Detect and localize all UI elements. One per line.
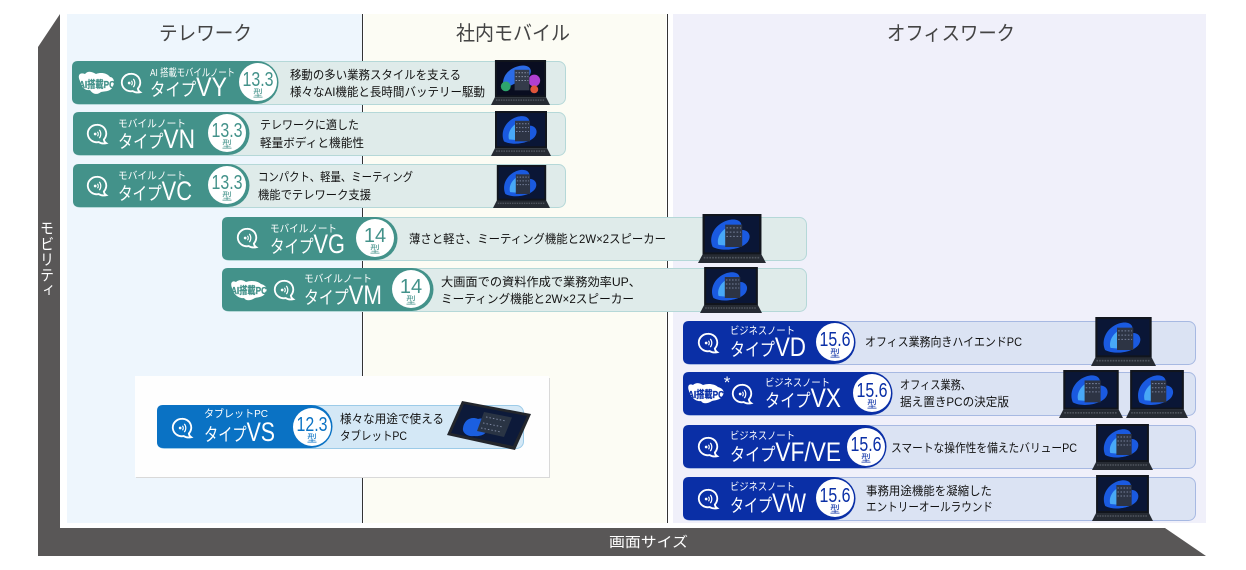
- size badge: 13.3: 型: [222, 138, 232, 151]
- icon: speech bubble: [275, 281, 293, 299]
- size badge: 13.3: [208, 114, 246, 152]
- size badge: 13.3: [208, 166, 246, 204]
- row: type VS: タブレットPC: [340, 428, 407, 443]
- icon: speech bubble: [88, 125, 106, 143]
- badge: AI PC: AI搭載PC: [231, 284, 267, 297]
- row: type VM: ミーティング機能と2W×2スピーカー: [441, 292, 634, 306]
- laptop image: [493, 165, 550, 208]
- row: type VM: タイプVM: [304, 280, 382, 310]
- size badge: 15.6: 型: [830, 503, 840, 516]
- row: type VN: [73, 111, 566, 156]
- row: type VF/VE: スマートな操作性を備えたバリューPC: [891, 440, 1077, 455]
- size badge: 15.6: 15.6: [856, 380, 888, 402]
- icon: speech bubble: [238, 229, 256, 247]
- row: type VW: タイプVW: [730, 488, 806, 518]
- axis label: screen size: 画面サイズ: [609, 534, 688, 550]
- size badge: 15.6: [816, 323, 854, 361]
- row: type VD: オフィス業務向きハイエンドPC: [865, 334, 1022, 349]
- heading: telework: テレワーク: [159, 22, 252, 45]
- row: type VY: 移動の多い業務スタイルを支える: [290, 68, 461, 82]
- row: type VG: [222, 214, 806, 263]
- row: type VS: [157, 401, 531, 450]
- row: type VG: モバイルノート: [270, 223, 337, 235]
- size badge: 15.6: [853, 374, 891, 412]
- row: type VW: エントリーオールラウンド: [866, 500, 993, 514]
- panel: office work background: [673, 14, 1206, 523]
- row: type VN: モバイルノート: [118, 118, 186, 130]
- badge: AI PC: [231, 280, 267, 300]
- row: type VW: [683, 475, 1196, 521]
- axis label: mobility: モビリティ: [39, 220, 55, 298]
- tablet image: [447, 401, 531, 450]
- row: type VN: テレワークに適した: [260, 118, 359, 132]
- row: type VY: タイプVY: [150, 72, 227, 102]
- icon: speech bubble: [699, 490, 717, 508]
- size badge: 12.3: 12.3: [296, 414, 328, 436]
- row: type VM: [222, 267, 806, 313]
- size badge: 12.3: [293, 408, 331, 446]
- row: type VG: 薄さと軽さ、ミーティング機能と2W×2スピーカー: [409, 231, 666, 246]
- row: type VX: [683, 370, 1196, 418]
- icon: speech bubble: [173, 419, 191, 437]
- row: type VC: モバイルノート: [118, 170, 186, 182]
- size badge: 12.3: 型: [307, 432, 317, 445]
- row: type VF/VE: ビジネスノート: [730, 430, 795, 442]
- size badge: 14: 型: [406, 294, 416, 307]
- icon: speech bubble: [733, 385, 751, 403]
- size badge: 15.6: 型: [861, 452, 871, 465]
- size badge: 13.3: 13.3: [242, 69, 274, 91]
- row: type VM: 大画面での資料作成で業務効率UP、: [441, 275, 641, 289]
- laptop image: [491, 111, 551, 156]
- row: type VS: タイプVS: [204, 417, 275, 447]
- size badge: 13.3: [239, 63, 277, 101]
- panel: in-office mobile background: [364, 14, 666, 523]
- row: type VX: ビジネスノート: [765, 377, 830, 389]
- row: type VW: ビジネスノート: [730, 481, 795, 493]
- laptop image: [1091, 317, 1156, 366]
- size badge: 14: 14: [400, 276, 422, 298]
- size badge: 13.3: 型: [222, 190, 232, 203]
- size badge: 15.6: [816, 479, 854, 517]
- size badge: 13.3: 13.3: [212, 172, 242, 194]
- size badge: 14: 型: [370, 243, 380, 256]
- row: type VY: [72, 60, 566, 105]
- row: type VX: 据え置きPCの決定版: [900, 395, 1009, 409]
- row: type VC: タイプVC: [118, 176, 192, 206]
- row: type VN: タイプVN: [118, 124, 195, 154]
- size badge: 15.6: 15.6: [820, 329, 850, 351]
- heading: in-office mobile: 社内モバイル: [456, 22, 570, 45]
- row: type VS: タブレットPC: [204, 407, 268, 420]
- heading: office work: オフィスワーク: [887, 22, 1015, 45]
- badge: AI PC: AI搭載PC: [688, 388, 724, 401]
- row: type VW: 事務用途機能を凝縮した: [866, 483, 992, 498]
- badge: AI PC: AI搭載PC: [79, 78, 115, 91]
- badge: AI PC: *: [724, 373, 731, 392]
- laptop image: black: [1059, 370, 1123, 418]
- badge: AI PC: [688, 373, 731, 403]
- row: type VC: コンパクト、軽量、ミーティング: [258, 170, 413, 184]
- row: type VY: 様々なAI機能と長時間バッテリー駆動: [290, 85, 485, 99]
- laptop image: [700, 267, 762, 313]
- row: type VX: タイプVX: [765, 383, 841, 413]
- row: type VD: [683, 317, 1196, 366]
- laptop image: gray: [1126, 370, 1188, 418]
- row: type VX: オフィス業務、: [900, 378, 971, 392]
- size badge: 13.3: 13.3: [212, 120, 242, 142]
- size badge: 15.6: 15.6: [850, 434, 882, 456]
- row: type VF/VE: [683, 424, 1196, 470]
- row: type VD: ビジネスノート: [730, 325, 795, 337]
- icon: speech bubble: [699, 438, 717, 456]
- icon: speech bubble: [88, 177, 106, 195]
- laptop image: [698, 214, 766, 263]
- badge: AI PC: [79, 72, 115, 94]
- laptop image: [1092, 475, 1153, 521]
- row: type VS: 様々な用途で使える: [340, 411, 444, 426]
- laptop image: [1092, 424, 1153, 470]
- size badge: 14: 14: [364, 225, 386, 247]
- row: type VN: 軽量ボディと機能性: [260, 135, 364, 150]
- laptop image: [491, 60, 550, 105]
- icon: speech bubble: [699, 334, 717, 352]
- row: type VC: [73, 164, 566, 208]
- row: type VF/VE: タイプVF/VE: [730, 437, 841, 467]
- row: type VG: タイプVG: [270, 229, 345, 259]
- panel: tablet card: [135, 376, 550, 478]
- size badge: 15.6: 15.6: [820, 485, 850, 507]
- row: type VM: モバイルノート: [304, 273, 372, 285]
- row: type VD: タイプVD: [730, 332, 806, 362]
- row: type VC: 機能でテレワーク支援: [258, 188, 371, 202]
- size badge: 14: [356, 219, 394, 257]
- size badge: 15.6: 型: [830, 347, 840, 360]
- icon: speech bubble: [122, 74, 140, 92]
- size badge: 13.3: 型: [253, 87, 263, 100]
- size badge: 15.6: [847, 428, 885, 466]
- row: type VY: AI 搭載モバイルノート: [150, 66, 235, 79]
- size badge: 15.6: 型: [867, 398, 877, 411]
- panel: telework background: [67, 14, 362, 523]
- size badge: 14: [392, 270, 430, 308]
